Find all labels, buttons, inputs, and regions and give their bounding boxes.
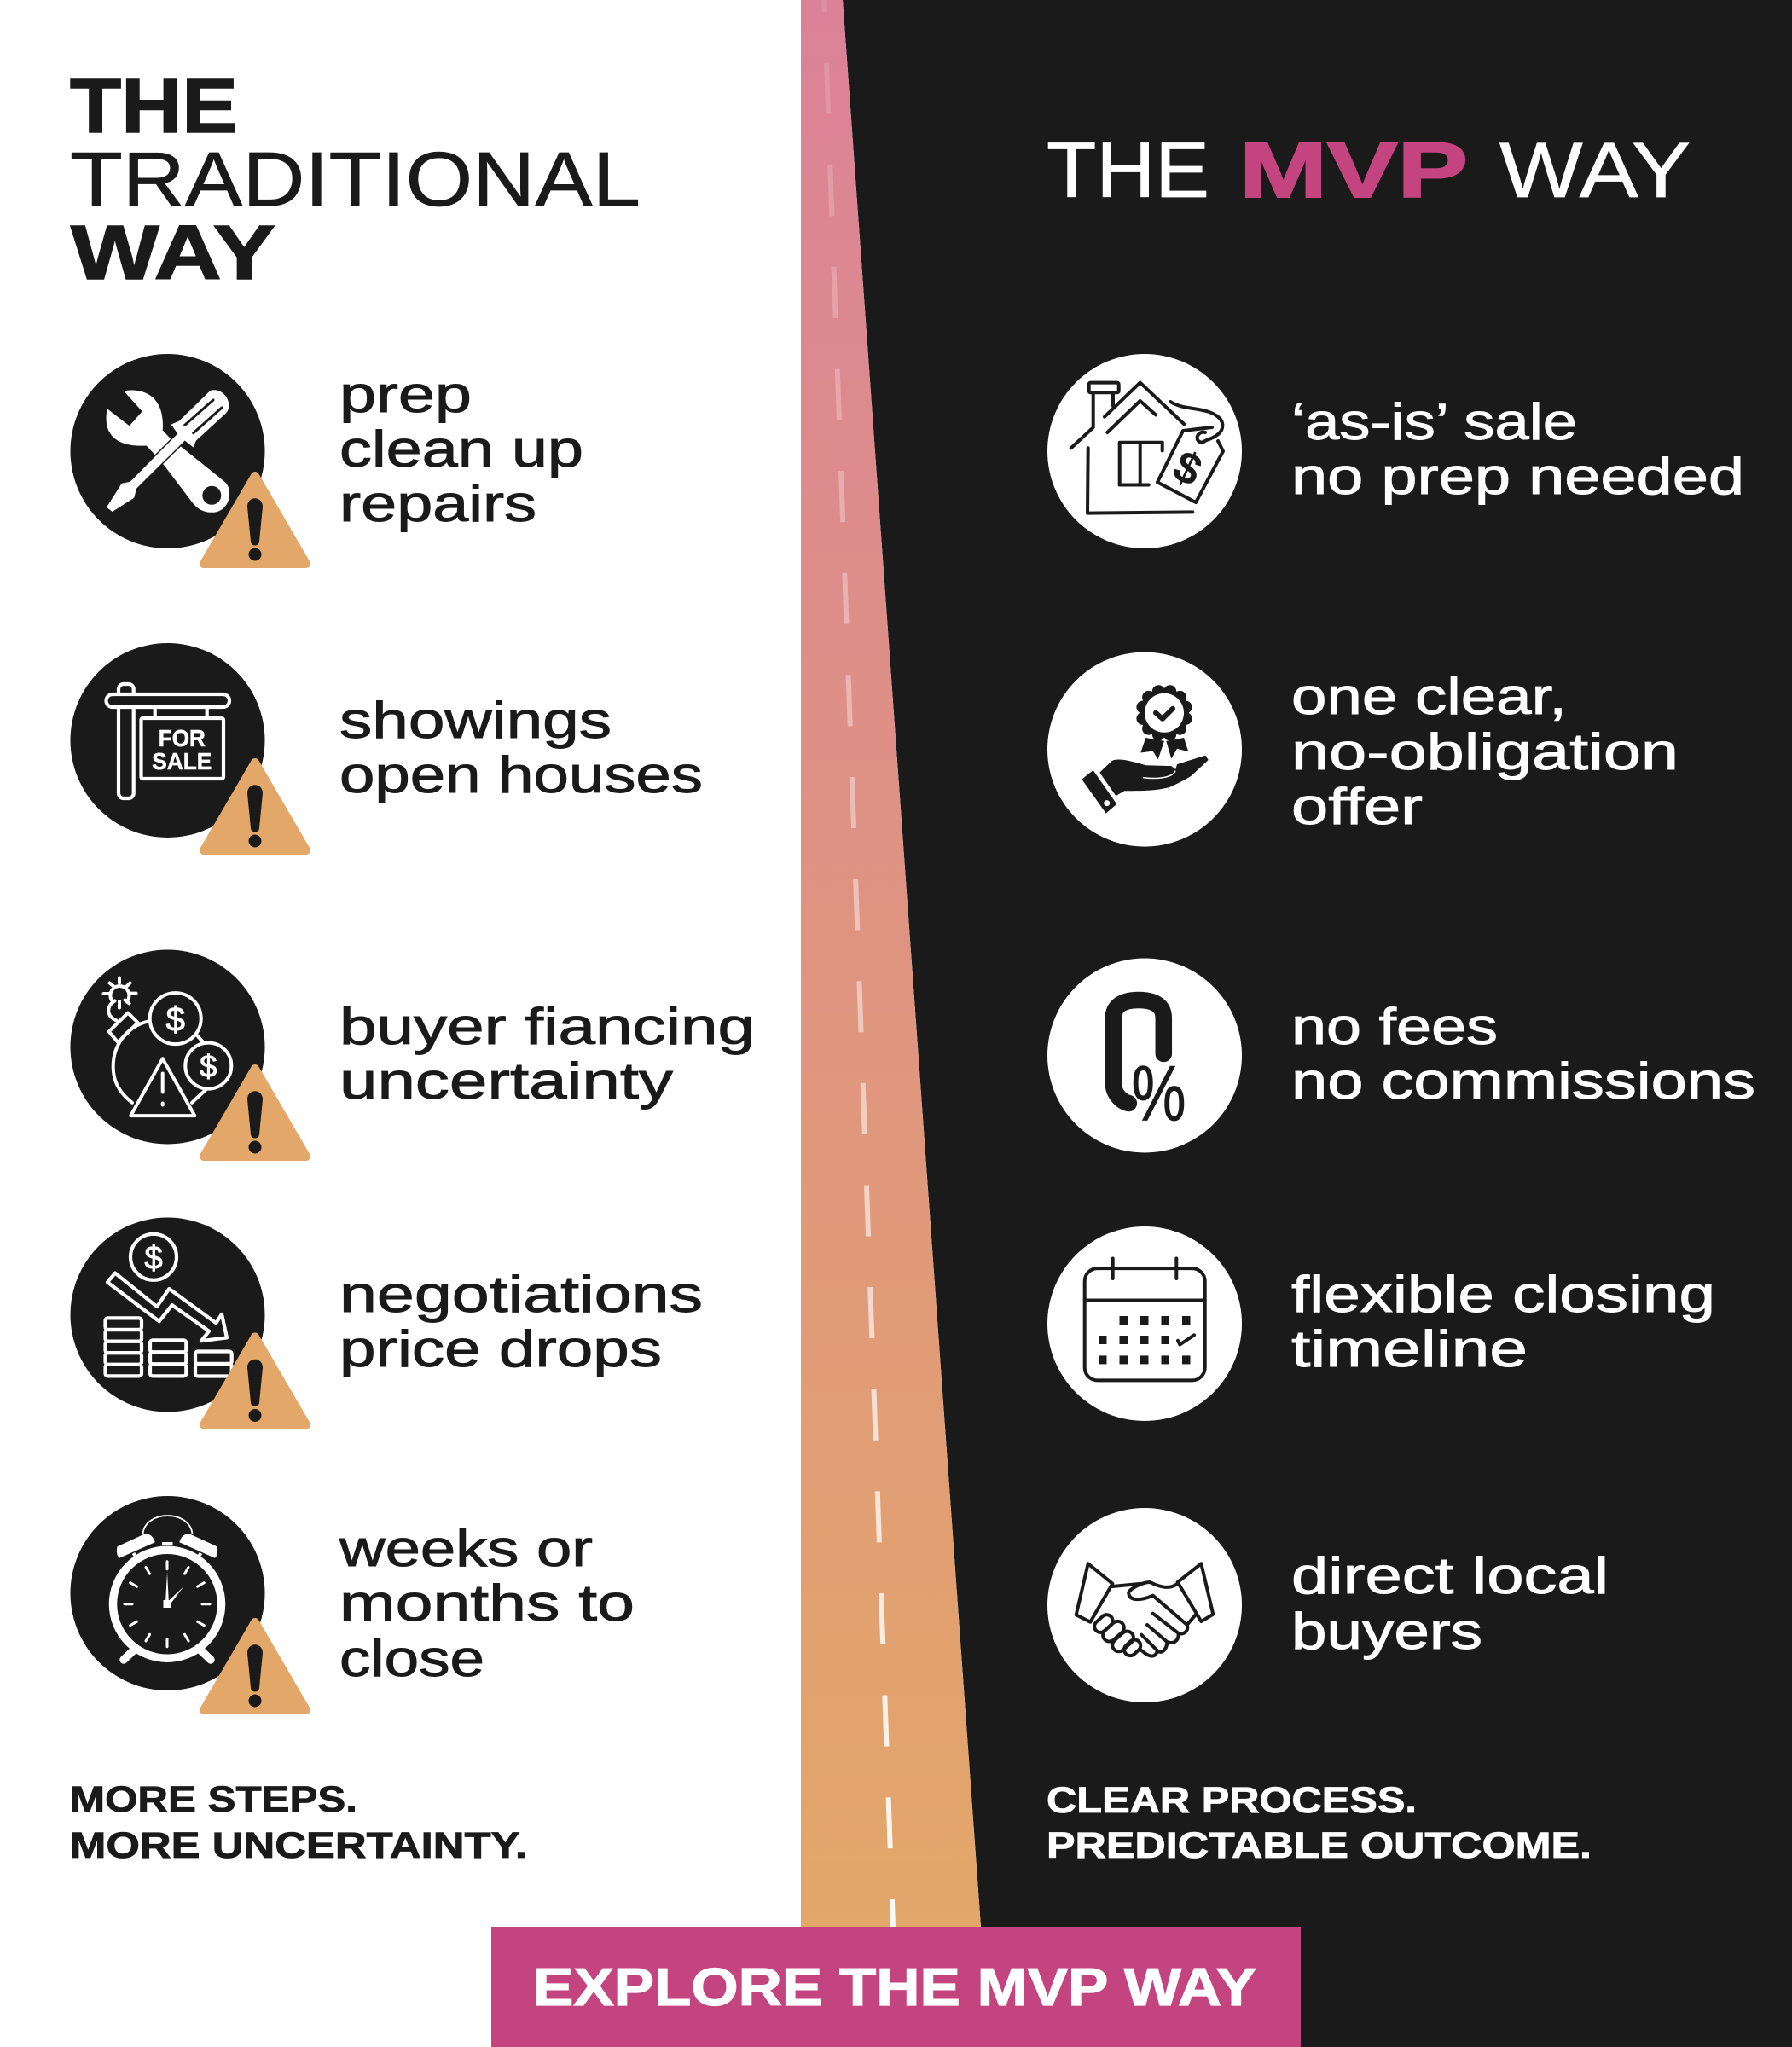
icon: price drop chart with warning: $ [144, 1240, 163, 1276]
text: weeks or months to close: close [339, 1630, 484, 1687]
text: buyer financing uncertainty [339, 998, 755, 1110]
icon: alarm clock with warning [70, 1496, 306, 1710]
text: negotiations, price drops: negotiations [339, 1266, 703, 1323]
text: no fees no commissions [1291, 998, 1755, 1110]
text: buyer financing uncertainty: uncertainty [339, 1052, 673, 1110]
heading: the mvp way: THE [1047, 127, 1209, 214]
icon: tools with warning [70, 354, 306, 564]
text: as-is sale, no prep needed: ‘as-is’ sale [1291, 393, 1577, 450]
icon: for sale sign with warning: FOR [159, 725, 206, 751]
icon: hand with award badge [1047, 652, 1242, 847]
button: explore the mvp way: EXPLORE THE MVP WAY [533, 1958, 1256, 2017]
icon: zero percent: % [1131, 1051, 1186, 1138]
icon: zero percent [1047, 959, 1242, 1153]
footer: more steps: MORE UNCERTAINTY. [70, 1825, 527, 1866]
text: as-is sale, no prep needed [1291, 393, 1744, 505]
text: negotiations, price drops [339, 1266, 703, 1377]
text: flexible closing timeline: flexible closing [1291, 1266, 1715, 1323]
footer: more steps [70, 1779, 527, 1866]
text: one clear no-obligation offer: one clear, [1291, 668, 1567, 725]
text: weeks or months to close: months to [339, 1574, 635, 1632]
icon: financing bomb with warning [70, 950, 306, 1157]
text: direct local buyers: buyers [1291, 1603, 1482, 1660]
text: no fees no commissions: no commissions [1291, 1052, 1755, 1110]
text: showings, open houses: open houses [339, 746, 703, 803]
text: prep, clean up, repairs: clean up [339, 420, 583, 478]
text: prep, clean up, repairs [339, 366, 583, 532]
icon: handshake [1047, 1508, 1242, 1702]
text: prep, clean up, repairs: prep [339, 366, 472, 423]
text: showings, open houses: showings [339, 692, 612, 749]
icon: for sale sign with warning: SALE [152, 748, 212, 774]
text: buyer financing uncertainty: buyer fiancing [339, 998, 755, 1055]
text: one clear no-obligation offer: no-obligation [1291, 723, 1679, 780]
icon: calendar [1047, 1226, 1242, 1421]
button: explore the mvp way [491, 1927, 1301, 2047]
text: as-is sale, no prep needed: no prep needed [1291, 448, 1744, 505]
heading: the traditional way: TRADITIONAL [70, 137, 641, 223]
text: weeks or months to close: weeks or [339, 1520, 593, 1577]
icon: financing bomb with warning: $ [200, 1049, 217, 1083]
text: negotiations, price drops: price drops [339, 1320, 662, 1377]
heading: the traditional way: THE [70, 64, 238, 149]
text: one clear no-obligation offer: offer [1291, 778, 1423, 835]
icon: price drop chart with warning [70, 1218, 306, 1424]
text: showings, open houses [339, 692, 703, 803]
icon: house with price tag [1047, 354, 1242, 548]
heading: the mvp way: MVP [1239, 127, 1468, 214]
icon: financing bomb with warning: $ [166, 1001, 185, 1039]
text: direct local buyers [1291, 1547, 1609, 1660]
text: flexible closing timeline [1291, 1266, 1715, 1377]
text: prep, clean up, repairs: repairs [339, 475, 536, 532]
heading: the traditional way [70, 64, 641, 296]
text: direct local buyers: direct local [1291, 1547, 1609, 1604]
text: weeks or months to close [339, 1520, 635, 1687]
text: flexible closing timeline: timeline [1291, 1320, 1528, 1377]
footer: clear process: PREDICTABLE OUTCOME. [1047, 1825, 1592, 1866]
dark background panel [843, 0, 1792, 2047]
footer: more steps: MORE STEPS. [70, 1779, 357, 1820]
heading: the mvp way: WAY [1499, 127, 1691, 214]
heading: the mvp way [1047, 127, 1691, 214]
footer: clear process: CLEAR PROCESS. [1047, 1780, 1417, 1821]
text: one clear no-obligation offer [1291, 668, 1679, 835]
text: no fees no commissions: no fees [1291, 998, 1498, 1055]
heading: the traditional way: WAY [71, 211, 275, 296]
icon: for sale sign with warning [70, 643, 306, 850]
footer: clear process [1047, 1780, 1592, 1866]
icon: house with price tag: $ [1166, 441, 1209, 496]
road divider [801, 0, 981, 1927]
